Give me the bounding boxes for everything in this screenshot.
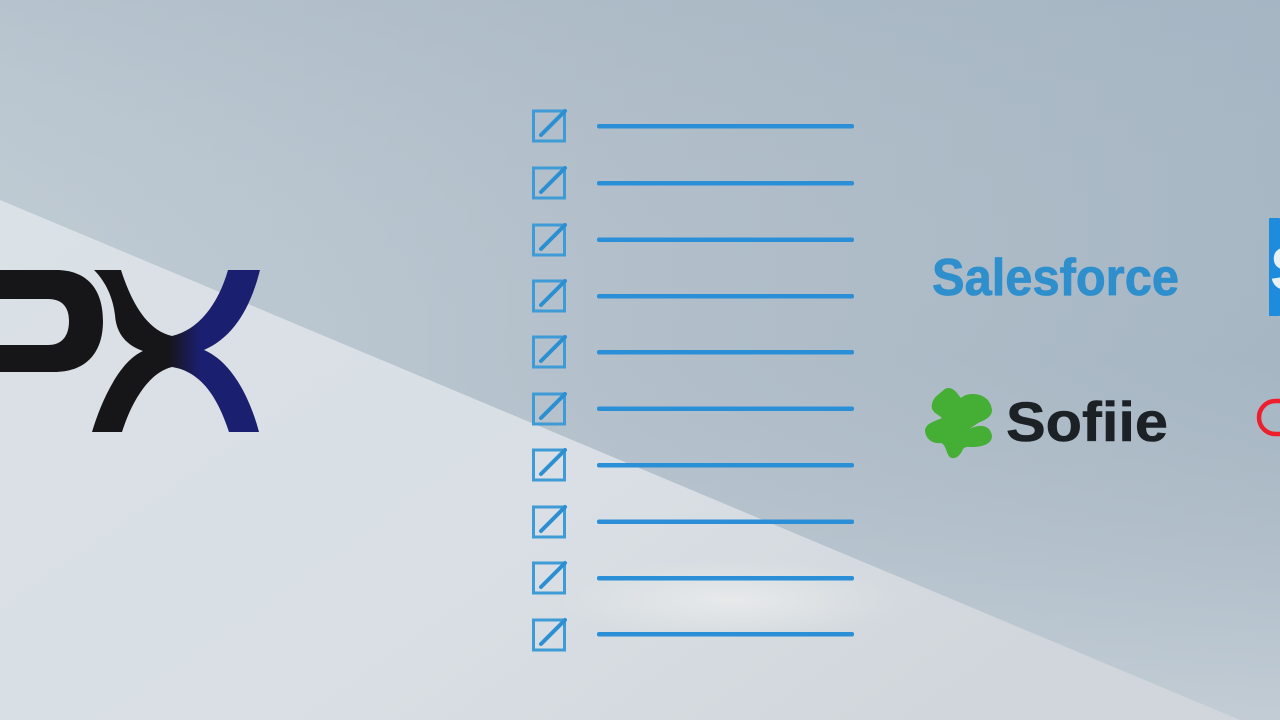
logo: Salesforce: Salesforce (932, 249, 1179, 307)
logo: PX (0, 270, 260, 432)
item 7 (534, 450, 854, 480)
logo: partial red ring (1259, 401, 1280, 434)
letter X (92, 270, 260, 432)
item 10 (534, 620, 854, 650)
item 3 (534, 225, 854, 255)
item 2 (534, 168, 854, 198)
item 6 (534, 394, 854, 424)
logo: Sofiie (925, 388, 1168, 458)
item 9 (534, 563, 854, 593)
wordmark: Sofiie (1006, 390, 1168, 453)
checklist (534, 111, 854, 650)
letter P (0, 270, 103, 372)
item 4 (534, 281, 854, 311)
item 5 (534, 337, 854, 367)
logo: partial blue square (1269, 218, 1280, 316)
icon: green puzzle piece (925, 388, 992, 458)
item 1 (534, 111, 854, 141)
item 8 (534, 507, 854, 537)
